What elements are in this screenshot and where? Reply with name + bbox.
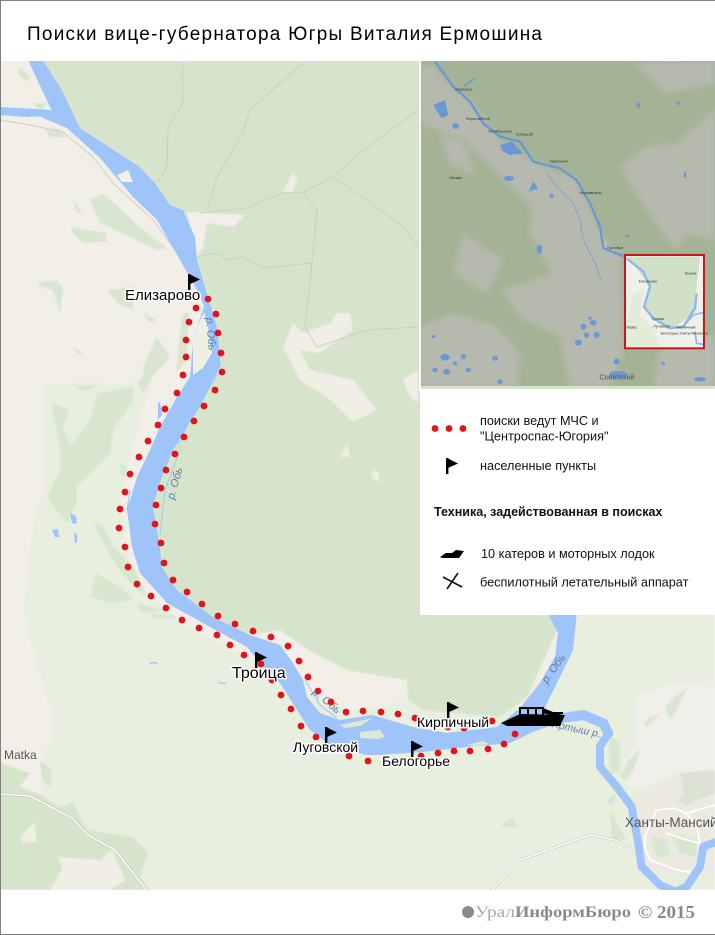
river labels: р. Обь: [165, 466, 185, 502]
settlement: Кирпичный: Кирпичный: [417, 714, 489, 730]
footer logo: © 2015: [638, 902, 695, 922]
footer logo: Урал: [475, 904, 515, 921]
inset place names: Советский: [599, 372, 635, 381]
river labels: р. Обь: [539, 652, 568, 687]
legend: search text: поиски ведут МЧС и: [480, 414, 599, 428]
inset place names: Приобье: [607, 245, 624, 250]
place labels: base map: [4, 748, 715, 830]
inset overview map: [420, 60, 715, 388]
settlement: Троица: Троица: [232, 665, 286, 682]
inset highlighted area: Белогорье Ханты-Мансийск: [661, 332, 708, 336]
inset highlighted area: Луговской: [653, 325, 670, 329]
inset highlighted area: Кирпичный: [677, 325, 695, 329]
place labels: base map: Matka: [4, 748, 37, 762]
settlement: Елизарово: Елизарово: [125, 287, 200, 304]
river islands: [30, 116, 490, 746]
inset highlighted area: Елизарово: [639, 279, 657, 283]
settlement: Кирпичный: [417, 702, 489, 730]
inset divider lines: [420, 60, 715, 390]
inset place names: Нягань: [449, 175, 462, 180]
river: Irtysh: [543, 715, 715, 892]
river labels: [165, 316, 602, 740]
legend: search text: "Центроспас-Югория": [480, 430, 608, 444]
inset highlighted area: Matka: [627, 326, 638, 330]
footer logo: [462, 902, 695, 922]
settlement: Белогорье: Белогорье: [382, 753, 450, 769]
settlement: Белогорье: [382, 741, 450, 769]
legend: equipment heading: Техника, задействованная в поисках: [434, 505, 662, 519]
legend: flag icon: [446, 458, 458, 474]
settlement: Луговской: Луговской: [293, 739, 358, 755]
inset highlighted area: [625, 255, 713, 348]
river: Ob: [0, 60, 577, 755]
legend: boats text: 10 катеров и моторных лодок: [481, 547, 655, 561]
footer logo: ИнформБюро: [515, 904, 631, 921]
settlement: Елизарово: [125, 274, 200, 304]
inset lakes: [431, 100, 706, 384]
river labels: р. Обь: [203, 316, 218, 351]
river labels: р. Обь: [309, 685, 343, 716]
legend: drone text: беспилотный летательный аппарат: [480, 576, 689, 590]
icon: rescue boat: [501, 707, 565, 726]
settlement: Троица: [232, 652, 286, 682]
inset highlighted area: Кышик: [685, 272, 697, 276]
legend: drone icon: [443, 573, 462, 589]
inset highlighted area: Троица: [652, 317, 665, 321]
panel: legend: [420, 390, 715, 615]
inset place names: [449, 87, 635, 381]
inset place names: Октябрьское: [488, 128, 513, 133]
inset place names: Заречный: [549, 158, 568, 163]
search route dots: [116, 296, 518, 764]
inset place names: Карымкары: [580, 190, 602, 195]
title: Поиски вице-губернатора Югры Виталия Ермошина: [27, 24, 542, 45]
inset river: [435, 62, 625, 282]
inset terrain patches: [420, 60, 715, 388]
inset place names: Шеркалы: [455, 87, 472, 92]
inset place names: Перегрёбное: [466, 116, 491, 121]
legend: boat icon: [440, 550, 464, 558]
inset place names: Большой: [516, 131, 533, 136]
small water channels and lakes: [52, 375, 337, 718]
settlement: Луговской: [293, 727, 358, 755]
legend: search dots: [432, 425, 466, 432]
river labels: Иртыш р.: [550, 718, 602, 740]
legend: settlements text: населенные пункты: [480, 459, 596, 473]
place labels: base map: Ханты-Мансий: [625, 815, 715, 830]
